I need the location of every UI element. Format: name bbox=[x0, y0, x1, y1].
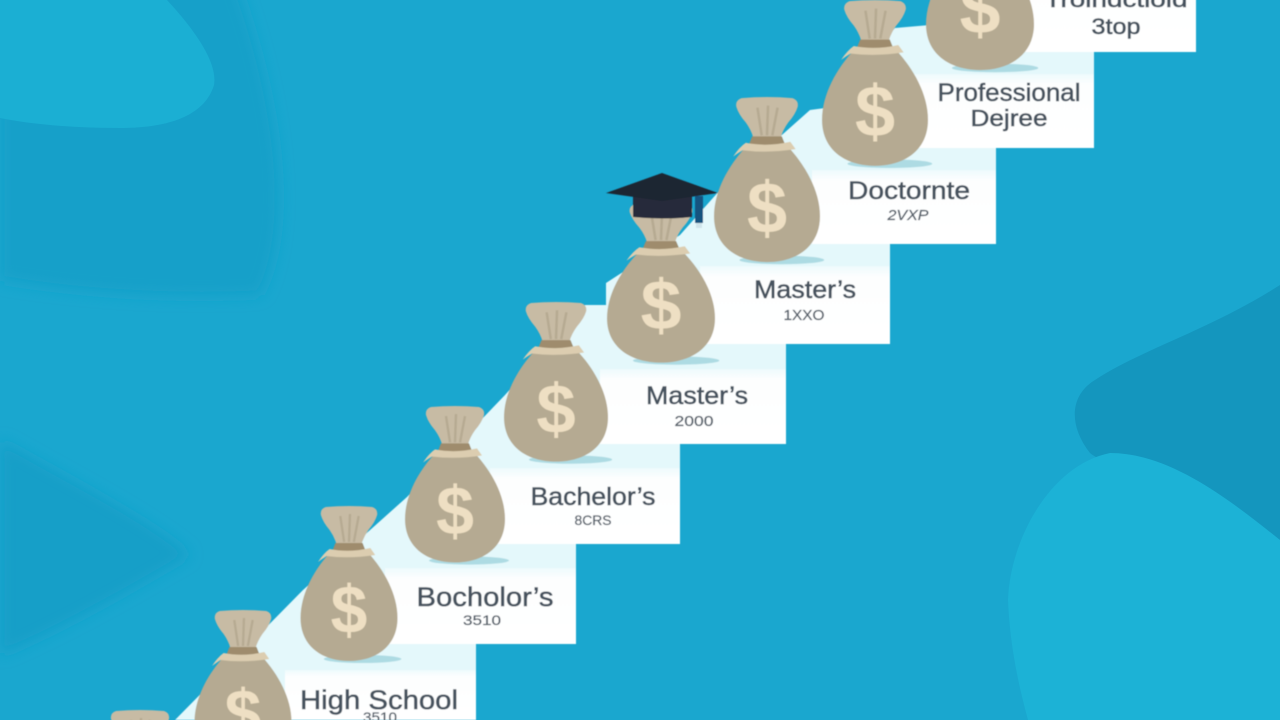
label: lower master's: Master’s bbox=[646, 382, 748, 410]
money bag 7 bbox=[300, 506, 401, 663]
label: top step: 3top bbox=[1092, 14, 1140, 39]
label: bachelor's bbox=[532, 486, 656, 526]
money bag 6: $ bbox=[436, 473, 474, 549]
step fronts bbox=[285, 0, 1196, 720]
money bag 5 bbox=[504, 302, 612, 464]
money bag 3: $ bbox=[747, 168, 787, 248]
label: upper master's bbox=[755, 280, 856, 321]
money bag 2: $ bbox=[855, 71, 895, 152]
label: doctorate bbox=[849, 180, 970, 221]
label: professional degree: Dejree bbox=[970, 105, 1048, 131]
label: upper master's: 1XXO bbox=[784, 307, 824, 324]
stair treads bbox=[174, 24, 1095, 720]
label: high school: High School bbox=[300, 685, 458, 715]
label: bocholor's bbox=[418, 586, 554, 626]
label: bachelor's: Bachelor’s bbox=[530, 483, 656, 511]
money bag 4: $ bbox=[641, 267, 681, 345]
label: bachelor's: 8CRS bbox=[574, 512, 612, 528]
money bag 1 bbox=[926, 0, 1038, 72]
money bag 2 bbox=[822, 0, 932, 168]
money bag 7: $ bbox=[331, 572, 367, 648]
money bag 8 bbox=[194, 610, 295, 720]
label: lower master's bbox=[647, 386, 748, 427]
label: bocholor's: 3510 bbox=[463, 612, 501, 628]
staircase bbox=[175, 0, 1196, 720]
label: professional degree: Professional bbox=[938, 79, 1080, 107]
label: professional degree bbox=[938, 79, 1080, 131]
label: bocholor's: Bocholor’s bbox=[416, 582, 554, 612]
label: doctorate: 2VXP bbox=[886, 207, 928, 224]
label: upper master's: Master’s bbox=[754, 276, 856, 304]
money bag 4 bbox=[607, 203, 719, 365]
graduation cap bbox=[606, 173, 718, 228]
money bag 3 bbox=[714, 97, 824, 264]
label: lower master's: 2000 bbox=[674, 413, 714, 430]
label: top step bbox=[1044, 0, 1188, 39]
money bag 6 bbox=[405, 406, 509, 565]
money bag 9 bbox=[110, 709, 170, 720]
money bag 5: $ bbox=[536, 369, 576, 448]
background blobs bbox=[4, 282, 1280, 720]
label: doctorate: Doctornte bbox=[848, 177, 970, 205]
